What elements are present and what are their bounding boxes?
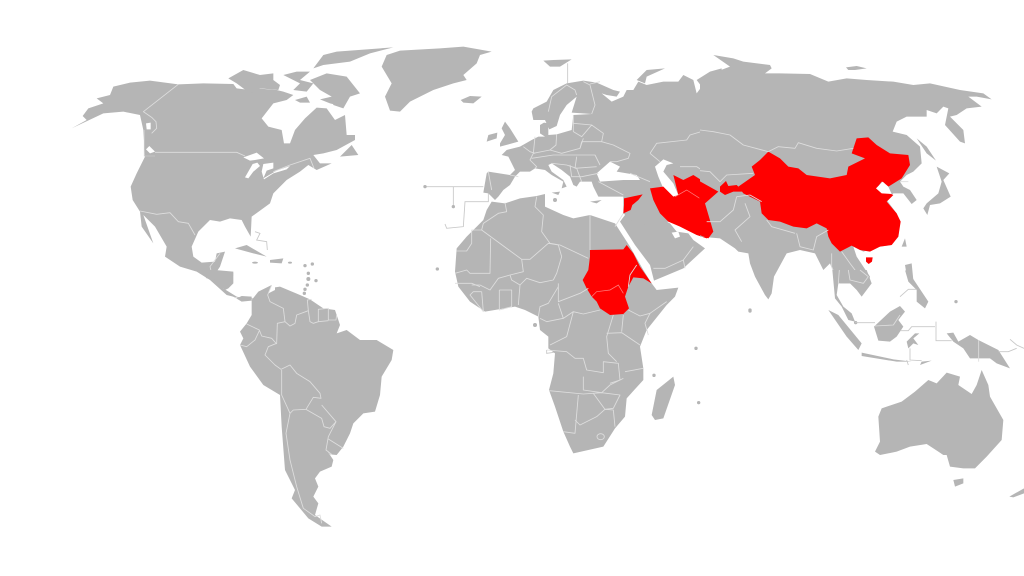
Great Britain bbox=[500, 122, 518, 147]
European borders bbox=[423, 82, 722, 228]
Vancouver sound and islands bbox=[146, 123, 155, 153]
Hainan highlighted bbox=[866, 257, 873, 264]
Sakhalin bbox=[917, 138, 936, 161]
New Zealand bbox=[1009, 488, 1024, 497]
panel: South America bbox=[200, 270, 393, 527]
Svalbard and its maritime line bbox=[543, 59, 572, 83]
panel: Southeast Asia and Oceania bbox=[748, 270, 1024, 497]
Novaya Zemlya bbox=[637, 68, 665, 83]
Java bbox=[862, 353, 912, 362]
Great Lakes bbox=[243, 153, 290, 179]
Qatar gulf detail bbox=[672, 232, 680, 238]
Newfoundland bbox=[340, 145, 358, 157]
Caspian Sea bbox=[655, 159, 678, 197]
Tajikistan highlighted bbox=[720, 181, 743, 195]
Bohai Sea bbox=[876, 182, 892, 194]
panel: Europe and West Asia bbox=[382, 47, 722, 238]
Japan bbox=[923, 167, 951, 215]
Black Sea bbox=[597, 162, 640, 182]
Borneo bbox=[874, 306, 905, 342]
Tasmania bbox=[953, 478, 963, 487]
Asian borders bbox=[700, 130, 908, 283]
Greenland bbox=[382, 47, 492, 112]
Pacific and Indian Ocean dots bbox=[748, 300, 958, 324]
Sudan highlighted bbox=[583, 245, 652, 315]
Asia landmass bbox=[700, 55, 992, 299]
Iceland bbox=[461, 96, 482, 103]
panel: North America bbox=[72, 47, 393, 300]
Taiwan bbox=[902, 238, 907, 247]
New Guinea bbox=[947, 333, 1010, 368]
Sumatra bbox=[828, 310, 862, 350]
Caribbean islands bbox=[235, 245, 318, 295]
panel: Africa and Arabia bbox=[436, 194, 752, 453]
Ireland bbox=[487, 133, 497, 142]
Arabian peninsula bbox=[620, 212, 705, 281]
New Siberian Islands bbox=[846, 66, 867, 70]
Lesser Sunda Islands bbox=[920, 361, 932, 365]
Madagascar bbox=[652, 377, 675, 420]
Africa landmass bbox=[455, 194, 678, 453]
Sulawesi bbox=[907, 333, 919, 348]
Iran and Turkmenistan highlighted bbox=[650, 175, 718, 238]
South America landmass bbox=[240, 285, 393, 527]
China highlighted bbox=[738, 137, 910, 252]
Iran east highlighted bbox=[699, 181, 718, 238]
Arctic islands bbox=[228, 47, 393, 108]
Europe and western Russia landmass bbox=[483, 68, 722, 237]
African borders bbox=[455, 197, 693, 440]
Luzon bbox=[905, 263, 913, 280]
Australia bbox=[875, 370, 1003, 468]
Philippines bbox=[905, 270, 928, 308]
Southeast Asian borders bbox=[838, 270, 1024, 365]
panel: Central, East and South Asia bbox=[699, 55, 992, 299]
Mediterranean islands bbox=[552, 192, 602, 203]
Syria highlighted bbox=[623, 194, 643, 213]
Central America link bbox=[200, 270, 252, 302]
Southeast Asian peninsula bbox=[832, 270, 872, 322]
South American borders bbox=[240, 285, 343, 523]
North America mainland bbox=[72, 81, 355, 300]
country borders bbox=[140, 84, 314, 280]
Small islands bbox=[436, 267, 752, 404]
